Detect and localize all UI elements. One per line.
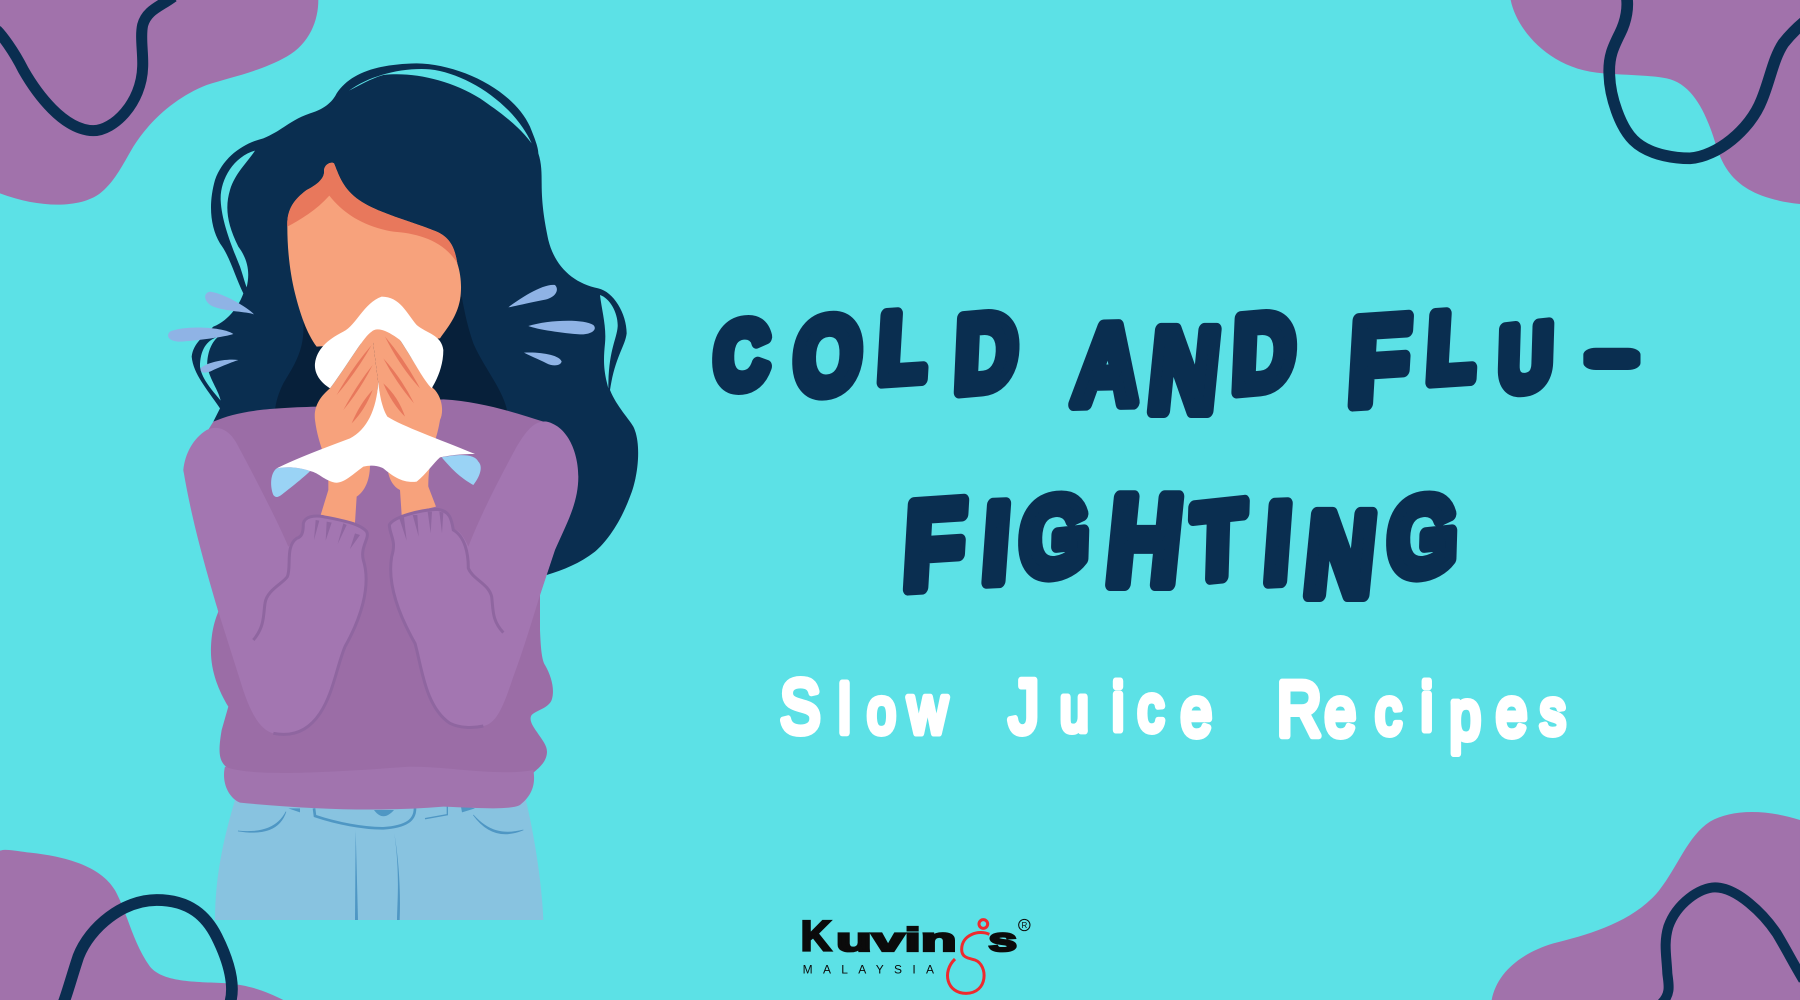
title line 1: L <box>871 291 934 403</box>
blob: top right corner <box>1511 0 1800 204</box>
title line 2: I <box>976 480 1017 606</box>
logo red g mark <box>948 920 989 993</box>
subtitle <box>780 665 1566 754</box>
subtitle: i <box>1421 669 1433 745</box>
sneeze droplets <box>168 285 595 373</box>
title line 1: A <box>1068 301 1147 428</box>
logo: Kuvings Malaysia <box>801 913 1030 993</box>
subtitle: w <box>907 672 948 748</box>
subtitle: e <box>1325 674 1356 751</box>
hair <box>192 63 638 575</box>
subtitle: p <box>1450 677 1481 754</box>
right sleeve <box>389 422 578 728</box>
subtitle: o <box>867 677 896 747</box>
title line 1: U <box>1491 304 1561 412</box>
title line 2: F <box>895 474 975 615</box>
subtitle: u <box>1060 675 1088 745</box>
tissue in front of hands <box>277 382 475 483</box>
tissue behind hands <box>315 297 443 388</box>
subtitle: e <box>1496 674 1527 751</box>
left sleeve <box>183 428 367 734</box>
title line 1: N <box>1144 304 1225 436</box>
logo tagline: MALAYSIA <box>803 962 944 976</box>
blob: bottom left corner <box>0 850 283 1000</box>
title line 1: D <box>946 290 1027 415</box>
subtitle: J <box>1009 665 1039 750</box>
logo wordmark: uvin <box>836 922 957 959</box>
title line 1: L <box>1420 291 1483 403</box>
subtitle: S <box>780 665 821 750</box>
tissue underside shading <box>271 455 481 497</box>
blob: top left corner <box>0 0 318 205</box>
title line 2: T <box>1182 480 1254 603</box>
title <box>703 290 1633 620</box>
title line 2: G <box>1378 473 1467 602</box>
subtitle: e <box>1181 674 1212 751</box>
finger crease lines <box>337 337 420 423</box>
subtitle: i <box>1112 669 1124 745</box>
title line 2: G <box>1010 473 1099 602</box>
neck shadow <box>275 297 507 412</box>
wrists and hands <box>315 329 442 523</box>
title line 1: D <box>1223 290 1304 415</box>
logo wordmark <box>801 913 1017 961</box>
logo registered mark <box>1019 919 1030 931</box>
logo wordmark: s <box>988 922 1017 959</box>
logo registered mark: R <box>1021 921 1027 930</box>
subtitle: c <box>1375 674 1402 748</box>
title hyphen: - <box>1591 314 1633 392</box>
title line 1: O <box>784 292 872 419</box>
logo wordmark: K <box>801 913 832 961</box>
illustration: woman sneezing into a tissue <box>168 63 638 920</box>
subtitle: l <box>838 671 851 748</box>
blob: bottom right corner <box>1492 812 1800 1000</box>
title line 1: C <box>706 301 778 410</box>
title line 1: F <box>1339 290 1419 431</box>
sweater body <box>183 399 577 790</box>
title line 2: H <box>1101 471 1188 612</box>
jeans <box>215 797 543 920</box>
sweater waistband <box>224 767 534 810</box>
title line 2: N <box>1300 488 1381 620</box>
subtitle: c <box>1138 671 1164 745</box>
subtitle: R <box>1277 665 1322 753</box>
face <box>287 163 461 347</box>
subtitle: s <box>1540 678 1566 748</box>
title line 2: I <box>1257 480 1298 606</box>
